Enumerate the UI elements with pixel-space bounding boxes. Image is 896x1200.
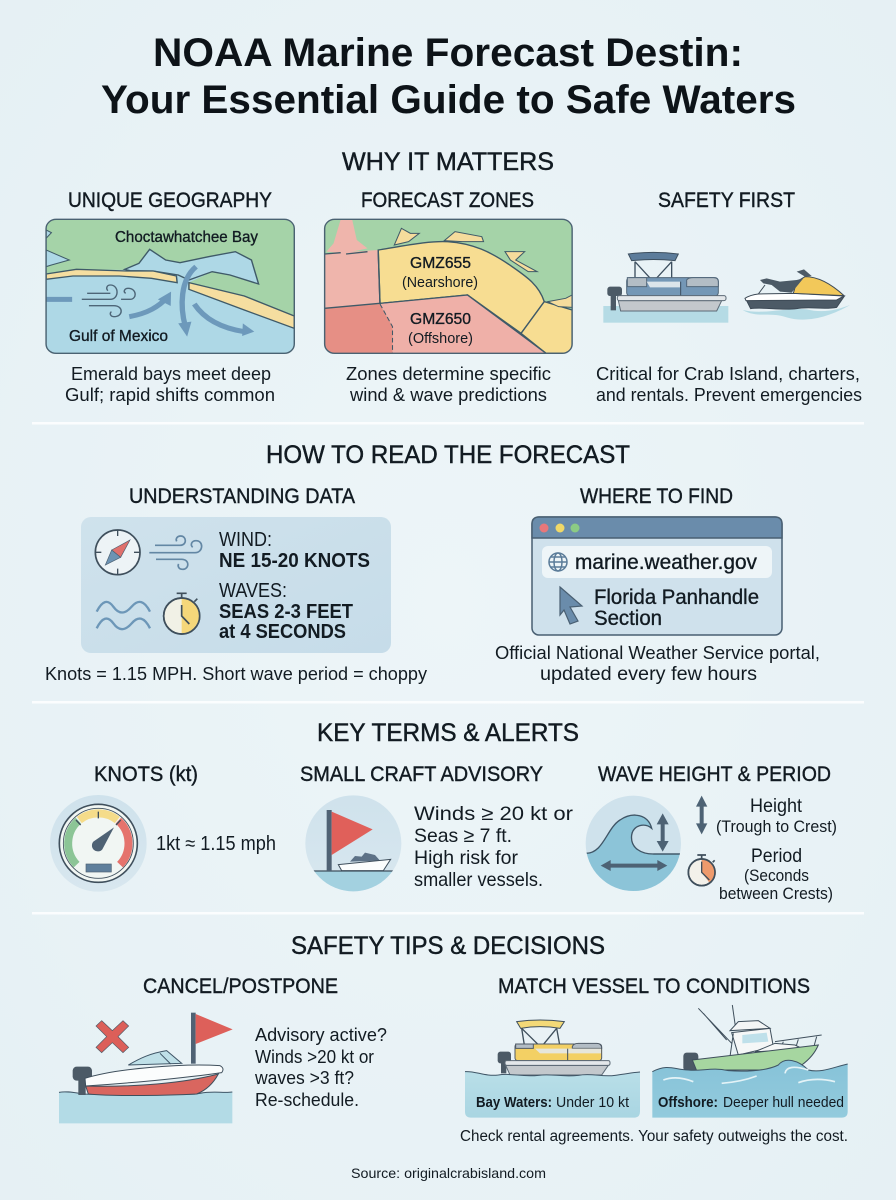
section: key terms and alerts <box>50 719 837 903</box>
panel: browser window <box>532 517 782 635</box>
text: advisory criteria: Winds ≥ 20 kt or <box>414 803 574 825</box>
label: offshore: Offshore: <box>658 1094 718 1111</box>
text: cancel criteria: waves >3 ft? <box>254 1067 354 1088</box>
icon: pontoon and jet ski <box>603 252 850 323</box>
source: Source: originalcrabisland.com <box>351 1165 546 1181</box>
title <box>101 31 796 122</box>
text: waves <box>219 580 353 643</box>
icon: speed gauge <box>50 795 147 892</box>
text: period: Period <box>751 846 802 867</box>
caption: zones: wind & wave predictions <box>349 385 547 405</box>
text: height <box>716 796 837 836</box>
subheading: wave height and period: WAVE HEIGHT & PERIOD <box>598 763 831 786</box>
icon: cursor <box>560 587 582 624</box>
title: NOAA Marine Forecast Destin: <box>153 31 743 75</box>
zone label: GMZ650: GMZ650 <box>410 311 471 328</box>
icon: boat with advisory flag and cross <box>59 1013 233 1123</box>
caption: geography: Emerald bays meet deep <box>71 364 271 384</box>
subheading: forecast zones: FORECAST ZONES <box>361 189 534 212</box>
label: offshore: Deeper hull needed <box>723 1094 844 1111</box>
text: waves: at 4 SECONDS <box>219 621 346 643</box>
panel: bay waters pontoon <box>465 1020 640 1118</box>
text: wind: NE 15-20 KNOTS <box>219 550 370 572</box>
subheading: knots: KNOTS (kt) <box>94 763 198 786</box>
text: panhandle section: Section <box>594 607 662 630</box>
title: Your Essential Guide to Safe Waters <box>101 78 796 122</box>
section: safety tips and decisions <box>59 932 848 1145</box>
caption: safety: and rentals. Prevent emergencies <box>596 385 862 405</box>
text: cancel criteria <box>254 1024 387 1110</box>
subheading: unique geography: UNIQUE GEOGRAPHY <box>68 189 272 212</box>
heading: safety tips: SAFETY TIPS & DECISIONS <box>291 932 605 960</box>
text: cancel criteria: Advisory active? <box>255 1024 387 1045</box>
zone label: GMZ655: GMZ655 <box>410 255 471 272</box>
zone label: GMZ650 <box>408 311 473 347</box>
subheading: match vessel: MATCH VESSEL TO CONDITIONS <box>498 975 810 998</box>
text: wind <box>219 529 370 572</box>
caption: official portal: updated every few hours <box>540 663 757 685</box>
subheading: small craft advisory: SMALL CRAFT ADVISORY <box>300 763 543 786</box>
text: period <box>719 846 833 903</box>
text: period: (Seconds <box>744 867 809 885</box>
caption: geography <box>65 364 275 405</box>
text: url: marine.weather.gov <box>575 551 757 574</box>
zone label: GMZ655 <box>402 255 478 291</box>
text: advisory criteria: High risk for <box>414 847 518 869</box>
label: bay waters: Under 10 kt <box>556 1094 630 1111</box>
caption: safety: Critical for Crab Island, charters, <box>596 364 860 384</box>
text: waves: WAVES: <box>219 580 287 602</box>
caption: knots and period: Knots = 1.15 MPH. Short wave period = choppy <box>45 664 427 684</box>
text: advisory criteria <box>414 803 574 891</box>
wind lines <box>82 285 135 317</box>
text: advisory criteria: Seas ≥ 7 ft. <box>414 825 512 847</box>
subheading: understanding data: UNDERSTANDING DATA <box>129 485 355 508</box>
text: knot conversion: 1kt ≈ 1.15 mph <box>156 833 276 855</box>
label: bay waters: Bay Waters: <box>476 1094 552 1111</box>
subheading: cancel postpone: CANCEL/POSTPONE <box>143 975 338 998</box>
icon: wave diagram <box>586 796 716 892</box>
section: why it matters <box>46 148 862 405</box>
icon: advisory flag <box>303 795 403 894</box>
caption: zones: Zones determine specific <box>346 364 551 384</box>
caption: rental agreements: Check rental agreements. Your safety outweighs the cost. <box>460 1128 848 1145</box>
current arrows <box>46 267 244 332</box>
map label: bay: Choctawhatchee Bay <box>115 229 258 246</box>
caption: safety <box>596 364 862 405</box>
caption: zones <box>346 364 551 405</box>
text: panhandle section: Florida Panhandle <box>594 586 759 609</box>
map label: gulf: Gulf of Mexico <box>69 328 168 345</box>
text: advisory criteria: smaller vessels. <box>414 869 543 891</box>
caption: official portal: Official National Weather Service portal, <box>495 643 820 663</box>
text: cancel criteria: Winds >20 kt or <box>255 1046 374 1067</box>
zone label: GMZ650: (Offshore) <box>408 330 473 347</box>
text: wind: WIND: <box>219 529 272 551</box>
heading: how to read: HOW TO READ THE FORECAST <box>266 441 630 469</box>
subheading: safety first: SAFETY FIRST <box>658 189 795 212</box>
map: Destin geography <box>46 219 294 353</box>
icons: compass, wind, waves, stopwatch <box>95 530 202 634</box>
heading: key terms: KEY TERMS & ALERTS <box>317 719 579 747</box>
heading: why it matters: WHY IT MATTERS <box>342 148 554 176</box>
section: how to read the forecast <box>45 441 820 685</box>
caption: geography: Gulf; rapid shifts common <box>65 385 275 405</box>
label: bay waters <box>476 1094 630 1111</box>
panel: understanding data <box>81 517 391 653</box>
label: offshore <box>658 1094 844 1111</box>
caption: official portal <box>495 643 820 685</box>
text: panhandle section <box>594 586 759 630</box>
subheading: where to find: WHERE TO FIND <box>580 485 733 508</box>
text: period: between Crests) <box>719 885 833 903</box>
map: forecast zones <box>325 219 572 353</box>
text: cancel criteria: Re-schedule. <box>255 1089 359 1110</box>
text: height: Height <box>750 796 803 817</box>
panel: offshore sportfisher <box>652 1005 848 1118</box>
icon: globe <box>549 553 567 571</box>
zone label: GMZ655: (Nearshore) <box>402 274 478 291</box>
text: height: (Trough to Crest) <box>716 818 837 836</box>
text: waves: SEAS 2-3 FEET <box>219 601 353 623</box>
